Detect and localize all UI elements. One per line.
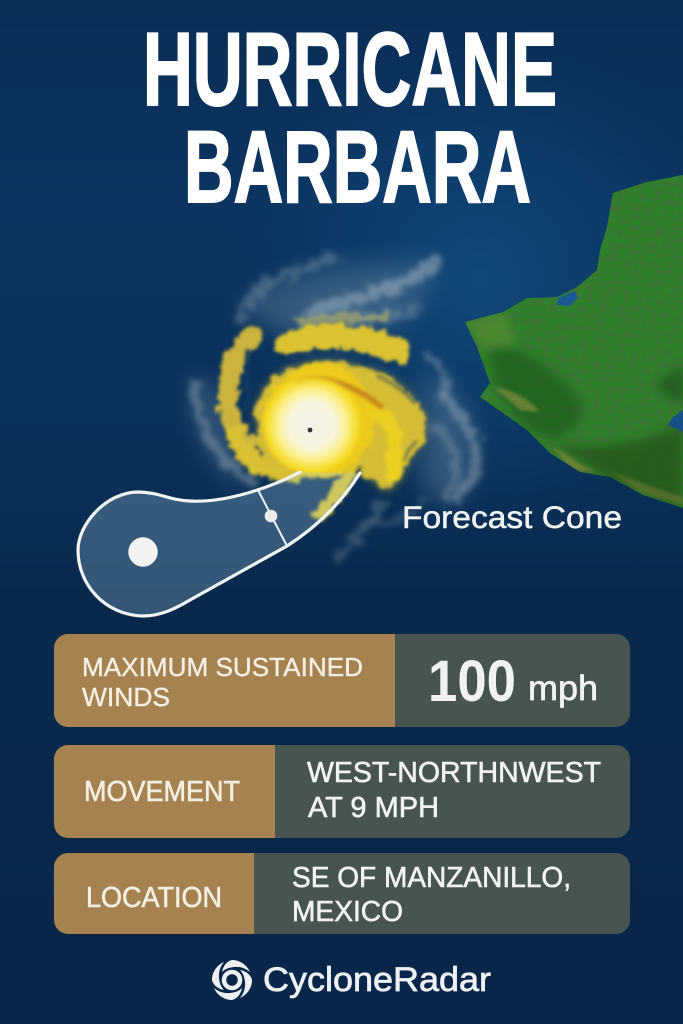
eye: [308, 428, 312, 432]
cone outline: [78, 472, 360, 616]
outer grey cloud wisps: [195, 258, 477, 560]
value: mexico: MEXICO: [292, 896, 403, 928]
label: movement: MOVEMENT: [84, 776, 240, 808]
value: at 9 mph: AT 9 MPH: [308, 792, 439, 824]
label: location: LOCATION: [86, 882, 222, 914]
orange arc: [296, 379, 383, 408]
value: se of manzanillo: SE OF MANZANILLO,: [292, 862, 571, 894]
panel: movement: [54, 745, 630, 838]
cone cross line: [258, 490, 287, 546]
grey haze under storm: [190, 262, 474, 502]
small position dot: [265, 510, 277, 522]
label: winds: WINDS: [82, 684, 170, 712]
spiral arm right: [366, 402, 396, 475]
lower left band: [236, 435, 310, 471]
gold disc: [264, 364, 376, 476]
large position dot: [128, 537, 158, 567]
land: Mexico and Central America: [460, 170, 683, 515]
soft glow under yellow clouds: [256, 362, 426, 490]
title: [143, 12, 557, 224]
forecast cone: [78, 472, 360, 616]
left rain band: [228, 335, 254, 445]
hurricane swirl: [190, 258, 477, 560]
upper faint band: [300, 316, 385, 322]
logo: CycloneRadar: [212, 960, 491, 1000]
lower tail: [319, 462, 352, 514]
wordmark: CycloneRadar: [263, 961, 491, 999]
panel: location: [54, 853, 630, 934]
upper rain band: [288, 337, 396, 350]
value: west-northwest: WEST-NORTHNWEST: [307, 757, 601, 789]
main mass: [256, 362, 426, 490]
inland bay at right edge: [668, 410, 683, 432]
value: 100 mph: [428, 649, 598, 714]
yellow rain bands and main cloud mass: [228, 316, 426, 514]
icon: cyclone: [212, 960, 252, 1000]
label: maximum sustained winds: MAXIMUM SUSTAINED: [82, 654, 363, 682]
value: 100 mph: 100: [428, 649, 516, 714]
value: 100 mph: mph: [528, 669, 598, 708]
panel: maximum sustained winds: [54, 634, 630, 727]
white core: [260, 373, 364, 477]
forecast cone label: Forecast Cone: [402, 499, 622, 535]
lagoon on land: [557, 291, 578, 306]
dark gaps between bands: [246, 352, 416, 460]
